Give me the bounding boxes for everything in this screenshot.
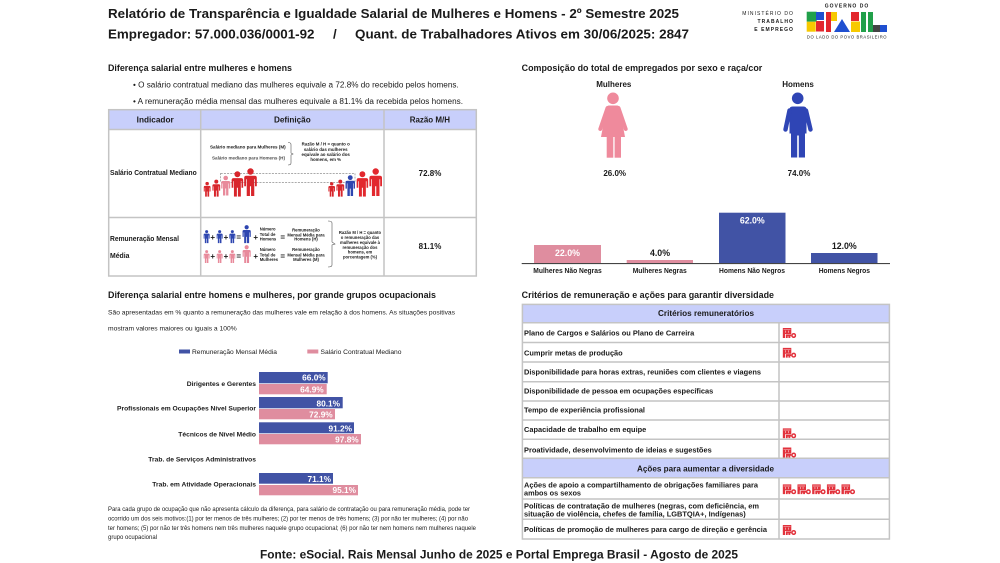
diagram: remuneração média: Remuneração (292, 228, 320, 232)
text block: explicação (108, 309, 456, 332)
criteria rows: Plano de Cargos e Salários ou Plano de Carreira (524, 328, 695, 337)
text block: explicação: São apresentadas em % quanto a remuneração das mulheres vale em relação à dos homens. As situações positivas (108, 309, 456, 316)
diagram: remuneração média: Razão M / H = quanto (339, 230, 382, 235)
diagram: remuneração média: homens, em (348, 250, 372, 254)
action rows (524, 480, 768, 534)
panel: tabela de indicadores (108, 109, 477, 276)
bar chart: sexo e raça/cor: Homens Não Negros (719, 268, 785, 275)
diagram: remuneração média: = (280, 252, 285, 261)
panel: homens: Homens (782, 80, 814, 89)
panel: mulheres (596, 80, 632, 178)
bar chart: sexo e raça/cor: 22.0% (555, 248, 580, 258)
bar chart: grupos ocupacionais: 91.2% (328, 423, 353, 433)
action rows: situação de violência, chefes de família, LGBTQIA+, Indígenas) (524, 510, 746, 519)
title (108, 6, 689, 41)
diagram: salário mediano (204, 142, 382, 197)
bar chart: sexo e raça/cor: 62.0% (740, 216, 765, 226)
bar chart: sexo e raça/cor: Mulheres Não Negras (533, 268, 602, 275)
text block: nota: ocorrido um dos seis motivos:(1) por ter menos de três mulheres; (2) por ter menos de três homens; (3) por não ter mulheres; (4) por não (108, 516, 469, 522)
bar chart: grupos ocupacionais: 80.1% (316, 398, 341, 408)
header: critérios remuneratórios: Critérios remuneratórios (658, 309, 755, 318)
bar chart: sexo e raça/cor: 12.0% (832, 241, 857, 251)
bar chart: grupos ocupacionais: Profissionais em Ocupações Nível Superior (117, 406, 256, 412)
diagram: remuneração média: mulheres equivale à (340, 240, 381, 245)
bar chart: grupos ocupacionais: Trab. em Atividade Operacionais (152, 482, 256, 488)
table header: Definição (274, 115, 311, 124)
diagram: salário mediano: Razão M / H = quanto o (302, 142, 350, 147)
diagram: remuneração média: + (253, 252, 258, 261)
bar chart: sexo e raça/cor (522, 213, 890, 275)
diagram: salário mediano: Salário mediano para Mulheres (M) (210, 144, 286, 149)
value: 81.1%: 81.1% (419, 242, 441, 251)
logo: governo do brasil (807, 4, 887, 40)
criteria rows: Cumprir metas de produção (524, 348, 623, 357)
text block: explicação: mostram valores maiores ou iguais a 100% (108, 325, 237, 332)
header: ações: Ações para aumentar a diversidade (637, 464, 775, 473)
diagram: remuneração média: + (210, 233, 215, 242)
diagram: remuneração média: Total de (260, 252, 276, 258)
bar chart: grupos ocupacionais (117, 372, 361, 495)
table header (137, 115, 450, 124)
text block: resumo (133, 80, 463, 106)
diagram: remuneração média: Mensal Média para (287, 252, 325, 258)
criteria rows: Tempo de experiência profissional (524, 406, 645, 415)
table header: Indicador (137, 115, 174, 124)
criteria rows: Disponibilidade para horas extras, reuniões com clientes e viagens (524, 368, 761, 377)
bar chart: grupos ocupacionais: Dirigentes e Gerentes (187, 381, 256, 388)
panel: homens: 74.0% (788, 169, 810, 178)
text block: nota: ter homens; (5) por não ter três homens nem três mulheres naquele grupo ocupacional; (6) por não ter nem homens nem mulheres naquele (108, 526, 477, 532)
criteria rows: Disponibilidade de pessoa em ocupações específicas (524, 387, 713, 396)
icons: ações (783, 484, 854, 535)
criteria rows: Proatividade, desenvolvimento de ideias e sugestões (524, 445, 712, 454)
bar chart: grupos ocupacionais: 95.1% (332, 485, 357, 495)
value: 72.8%: 72.8% (419, 169, 441, 178)
action rows: Políticas de promoção de mulheres para cargo de direção e gerência (524, 525, 768, 534)
text block: resumo: • A remuneração média mensal das mulheres equivale a 81.1% da recebida pelos homens. (133, 97, 463, 106)
diagram: remuneração média: Homens (H) (294, 237, 318, 242)
table header: Razão M/H (410, 115, 450, 124)
row label: remuneração mensal média (110, 236, 179, 260)
text block: nota: Para cada grupo de ocupação que não apresenta cálculo da diferença, para salário de contratação ou para remuneração média, pode ter (108, 507, 470, 513)
text block: resumo: • O salário contratual mediano das mulheres equivale a 72.8% do recebido pelos homens. (133, 80, 459, 89)
diagram: remuneração média: Mensal Média para (287, 232, 325, 238)
diagram: remuneração média: Remuneração (292, 247, 320, 252)
title: Relatório de Transparência e Igualdade Salarial de Mulheres e Homens - 2º Semestre 2025 (108, 6, 680, 21)
diagram: remuneração média: Mulheres (260, 257, 279, 262)
row label: salário contratual mediano: Salário Contratual Mediano (110, 170, 197, 177)
panel: mulheres: 26.0% (603, 169, 626, 178)
bar chart: sexo e raça/cor: Mulheres Negras (633, 268, 687, 275)
bar chart: sexo e raça/cor: Homens Negros (819, 268, 870, 275)
diagram: salário mediano: homens, em % (310, 157, 341, 162)
diagram: remuneração média: Número (260, 226, 276, 232)
diagram: remuneração média: Total de (260, 232, 276, 237)
diagram: salário mediano: salário das mulheres (304, 147, 348, 152)
bar chart: grupos ocupacionais: Técnicos de Nível Médio (178, 432, 256, 438)
criteria rows (524, 328, 761, 454)
legend: Salário Contratual Mediano (320, 349, 402, 356)
diagram: remuneração média: + (253, 233, 258, 242)
diagram: salário mediano: Salário mediano para Homens (H) (212, 156, 286, 161)
bar chart: grupos ocupacionais: 72.9% (309, 410, 333, 420)
diagram: remuneração média: = (280, 233, 285, 242)
action rows: Ações de apoio a compartilhamento de obrigações familiares para (524, 480, 759, 489)
diagram: remuneração média: = (236, 233, 241, 242)
legend: Remuneração Mensal Média (192, 349, 277, 356)
bar chart: sexo e raça/cor: 4.0% (650, 248, 670, 258)
diagram: salário mediano: equivale ao salário dos (302, 152, 350, 157)
title: Quant. de Trabalhadores Ativos em 30/06/2025: 2847 (355, 26, 689, 41)
diagram: remuneração média (204, 221, 382, 267)
title: Empregador: 57.000.036/0001-92 (108, 26, 314, 41)
title: / (333, 26, 337, 41)
legend (179, 349, 402, 356)
bar chart: grupos ocupacionais: Trab. de Serviços Administrativos (148, 456, 256, 464)
diagram: remuneração média: Homens (260, 237, 277, 242)
icon: mulher (600, 92, 626, 158)
icon: homem (786, 92, 810, 158)
diagram: remuneração média: + (224, 233, 229, 242)
heading: critérios: Critérios de remuneração e ações para garantir diversidade (522, 290, 774, 300)
logo: governo do brasil: DO LADO DO POVO BRASILEIRO (807, 35, 887, 40)
diagram: remuneração média: remuneração dos (343, 245, 378, 250)
diagram: remuneração média: Número (260, 247, 276, 252)
bar chart: grupos ocupacionais: 64.9% (300, 384, 324, 394)
heading: composição: Composição do total de empregados por sexo e raça/cor (522, 63, 763, 73)
panel: tabela de critérios (522, 304, 890, 539)
diagram: remuneração média: = (236, 252, 241, 261)
logo: ministério do trabalho e emprego: MINISTÉRIO DO (742, 10, 794, 17)
row label: remuneração mensal média: Remuneração Mensal (110, 236, 179, 243)
source: Fonte: eSocial. Rais Mensal Junho de 2025 e Portal Emprega Brasil - Agosto de 2025 (260, 548, 738, 562)
action rows: Políticas de contratação de mulheres (negras, com deficiência, em (524, 501, 760, 510)
diagram: remuneração média: + (224, 252, 229, 261)
row label: remuneração mensal média: Média (110, 253, 130, 260)
heading: grupos ocupacionais: Diferença salarial entre homens e mulheres, por grande grupos ocupacionais (108, 290, 436, 300)
diagram: remuneração média: + (210, 252, 215, 261)
bar chart: grupos ocupacionais: 71.1% (307, 474, 332, 484)
logo: ministério do trabalho e emprego: TRABALHO (758, 19, 794, 25)
bar chart: grupos ocupacionais: 66.0% (302, 373, 326, 383)
criteria rows: Capacidade de trabalho em equipe (524, 425, 646, 434)
logo: ministério do trabalho e emprego (742, 10, 794, 33)
icons: critérios (783, 328, 796, 458)
bar chart: grupos ocupacionais: 97.8% (335, 434, 359, 444)
diagram: remuneração média: o remuneração das (341, 235, 380, 240)
text block: nota: grupo ocupacional (108, 535, 157, 541)
heading: diferença salarial: Diferença salarial entre mulheres e homens (108, 63, 292, 73)
diagram: remuneração média: porcentagem (%) (343, 254, 378, 260)
panel: mulheres: Mulheres (596, 80, 632, 89)
text block: nota (108, 507, 477, 541)
panel: homens (782, 80, 814, 178)
logo: governo do brasil: GOVERNO DO (825, 4, 869, 10)
diagram: remuneração média: Mulheres (M) (293, 257, 320, 262)
logo: ministério do trabalho e emprego: E EMPREGO (754, 27, 794, 33)
action rows: ambos os sexos (524, 489, 581, 498)
